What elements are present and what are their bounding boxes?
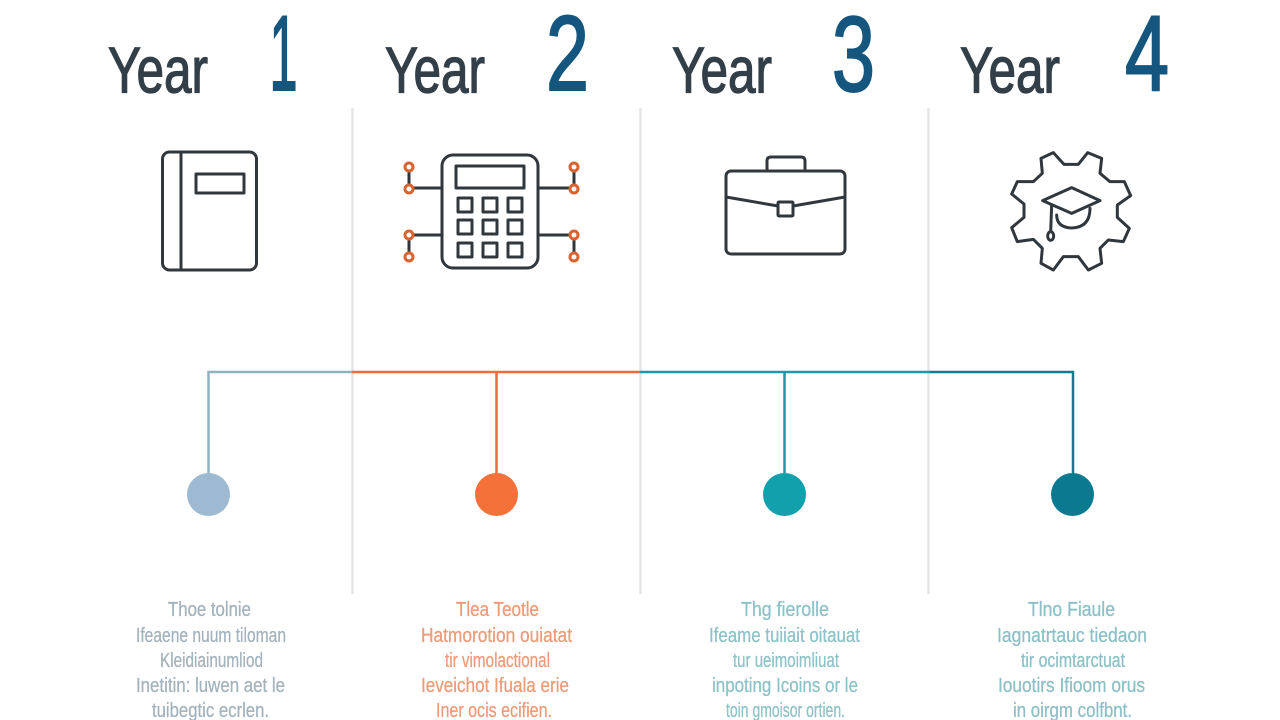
marker: year 4 bbox=[1051, 473, 1094, 516]
icon: briefcase bbox=[726, 157, 845, 254]
heading: year 3 bbox=[672, 0, 875, 114]
text block: year 1: Inetitin: luwen aet le bbox=[136, 675, 285, 697]
text block: year 1 bbox=[136, 599, 286, 720]
text block: year 1: Kleidiainumliod bbox=[160, 650, 263, 672]
text block: year 3 bbox=[709, 599, 860, 720]
timeline connector: year 4 bbox=[930, 372, 1073, 490]
icon: gear with graduation cap bbox=[1012, 153, 1131, 270]
text block: year 3: inpoting Icoins or le bbox=[712, 675, 858, 697]
icon: calculator with circuit nodes bbox=[405, 155, 578, 268]
panel: year 2 bbox=[352, 0, 640, 720]
timeline connector: year 3 bbox=[640, 372, 930, 490]
text block: year 2: Hatmorotion ouiatat bbox=[421, 625, 572, 647]
heading: year 1: Year bbox=[108, 34, 208, 106]
marker: year 2 bbox=[475, 473, 518, 516]
text block: year 4 bbox=[997, 599, 1147, 720]
text block: year 4: Iagnatrtauc tiedaon bbox=[997, 625, 1147, 647]
marker: year 1 bbox=[187, 473, 230, 516]
text block: year 2 bbox=[421, 599, 572, 720]
heading: year 4 bbox=[960, 0, 1169, 113]
panel: year 4 bbox=[930, 0, 1169, 720]
icon: notebook bbox=[162, 152, 256, 270]
heading: year 4: Year bbox=[960, 34, 1060, 106]
text block: year 1: Ifeaene nuum tiloman bbox=[136, 625, 286, 647]
text block: year 2: Ieveichot Ifuala eriе bbox=[421, 675, 569, 697]
timeline connector: year 1 bbox=[208, 372, 352, 490]
heading: year 2 bbox=[385, 0, 589, 113]
text block: year 2: Tlea Teotle bbox=[456, 599, 539, 621]
text block: year 4: Tlno Fiaule bbox=[1028, 599, 1115, 621]
heading: year 2: Year bbox=[385, 34, 485, 106]
marker: year 3 bbox=[763, 473, 806, 516]
panel: year 1 bbox=[108, 0, 352, 720]
text block: year 4: Iouotirs Ifioom orus bbox=[998, 675, 1145, 697]
text block: year 3: tur ueimoimliuat bbox=[733, 650, 839, 672]
heading: year 1 bbox=[108, 0, 298, 113]
text block: year 4: tir ocimtarctuat bbox=[1021, 650, 1125, 672]
text block: year 1: Thoe tolnie bbox=[168, 599, 251, 621]
text block: year 3: Ifeame tuiiait oitauat bbox=[709, 625, 860, 647]
heading: year 3: Year bbox=[672, 34, 772, 106]
timeline connector: year 2 bbox=[352, 372, 640, 490]
panel: year 3 bbox=[640, 0, 930, 720]
text block: year 3: Thg fierolle bbox=[741, 599, 829, 621]
text block: year 2: tir vimolactional bbox=[445, 650, 550, 672]
